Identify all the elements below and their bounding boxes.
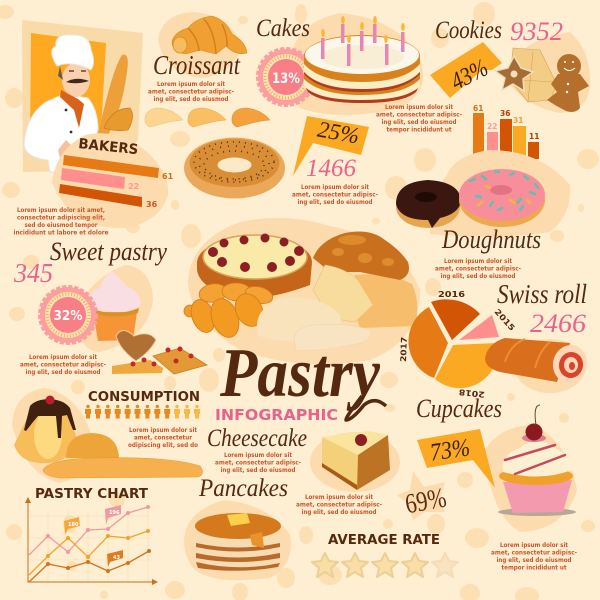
text: doughnuts lorem: ing elit, sed do eiusmod xyxy=(440,273,516,280)
icon: pancake stack xyxy=(195,513,281,571)
badge: 32% xyxy=(40,287,96,343)
badge: 69%: 69% xyxy=(403,483,449,520)
bar: 61: 61 xyxy=(162,172,174,181)
text: cheesecake lorem right: amet, consectetur adipisc- xyxy=(296,502,382,508)
icon: braided bread xyxy=(184,282,275,341)
panel: bakers portrait xyxy=(22,20,143,172)
panel: bakers bar chart xyxy=(52,133,174,228)
icon: baguette xyxy=(98,55,128,135)
heading: cakes: Cakes xyxy=(256,15,310,42)
icon: cookies xyxy=(495,48,589,112)
heading: doughnuts: Doughnuts xyxy=(441,225,541,254)
text: 25% lorem: ing elit, sed do eiusmod xyxy=(298,199,372,206)
callout: 43% xyxy=(430,42,502,98)
pie chart xyxy=(399,290,517,399)
text: croissant lorem: Lorem ipsum dolor sit xyxy=(157,81,225,88)
icon: cherry cake xyxy=(197,234,312,298)
panel: pancakes xyxy=(184,475,291,580)
panel: pudding and breads xyxy=(12,388,203,483)
text: croissant lorem: ing elit, sed do eiusmod xyxy=(154,96,228,103)
labels: years xyxy=(399,290,517,399)
labels: years: 2017 xyxy=(399,337,409,362)
text: sweet pastry lorem xyxy=(20,354,106,376)
callout: 25% xyxy=(293,116,369,176)
line chart xyxy=(25,497,158,585)
panel: cupcakes xyxy=(397,394,577,572)
text: consumption lorem: Lorem ipsum dolor sit xyxy=(129,427,197,434)
icon: cheesecake slice xyxy=(322,431,390,490)
icon: frosted cupcake xyxy=(88,271,140,341)
text: bakers lorem: Lorem ipsum dolor sit amet, xyxy=(17,207,105,214)
text: doughnuts lorem: Lorem ipsum dolor sit xyxy=(444,258,512,265)
flag: 180: 180 xyxy=(68,522,79,528)
heading: croissant: Croissant xyxy=(153,50,241,80)
heading: cookies: Cookies xyxy=(435,17,502,44)
heading: swiss roll: Swiss roll xyxy=(497,279,587,309)
icon: chocolate doughnut xyxy=(396,180,461,228)
text: cheesecake lorem right xyxy=(296,494,382,516)
subtitle: infographic: INFOGRAPHIC xyxy=(215,406,338,424)
panel: croissant xyxy=(145,12,270,127)
icon: dough xyxy=(257,297,371,350)
labels: years: 2016 xyxy=(438,290,466,299)
text: croissant lorem: amet, consectetur adipisc- xyxy=(148,88,234,96)
text: sweet pastry lorem: ing elit, sed do eiusmod xyxy=(26,369,100,376)
text: cupcakes lorem: tempor incididunt ut xyxy=(502,564,567,572)
text: cheesecake lorem left: amet, consectetur adipisc- xyxy=(215,460,301,466)
number: 1466: 1466 xyxy=(306,155,356,182)
icon: bun xyxy=(104,108,133,131)
panel: cakes xyxy=(256,13,462,134)
panel: swiss roll xyxy=(485,279,591,393)
heading: bakers: BAKERS xyxy=(78,136,139,158)
icon: gingerbread man xyxy=(547,54,589,112)
bar chart: five bars: 36 xyxy=(500,109,510,118)
text: cakes lorem: amet, consectetur adipisc- xyxy=(376,112,462,118)
text: cupcakes lorem xyxy=(491,542,577,572)
text: cupcakes lorem: amet, consectetur adipisc- xyxy=(491,550,577,556)
number: 345: 345 xyxy=(13,258,53,288)
callout: 73%: 73% xyxy=(428,434,472,467)
panel: central pastries xyxy=(184,218,420,364)
text: cheesecake lorem left: Lorem ipsum dolor sit xyxy=(224,452,292,459)
icon: waffles and heart cookie xyxy=(112,330,207,374)
callout: 73% xyxy=(417,429,495,488)
heading: pancakes: Pancakes xyxy=(198,475,288,502)
icon: pudding xyxy=(14,396,77,463)
icon: pink doughnut xyxy=(459,169,545,227)
panel: cookies xyxy=(430,17,590,113)
text: cakes lorem: tempor incididunt ut xyxy=(386,126,452,134)
text: cheesecake lorem right: ing elit, sed do eiusmod xyxy=(302,509,376,516)
text: consumption lorem: amet, consectetur xyxy=(134,434,193,442)
heading: average rate: AVERAGE RATE xyxy=(328,533,440,548)
panel: doughnuts xyxy=(396,150,570,280)
text: bakers lorem: incididunt ut labore et dolore xyxy=(14,230,108,236)
labels: years: 2018 xyxy=(458,387,485,399)
badge: 32%: 32% xyxy=(54,309,82,324)
icon: bread loaf xyxy=(350,274,417,328)
title: pastry infographic: Pastry xyxy=(219,335,381,412)
bar: 22: 22 xyxy=(128,182,139,191)
text: cakes lorem: ing elit, sed do eiusmod xyxy=(382,119,456,126)
text: doughnuts lorem xyxy=(435,258,521,280)
icon: croissant xyxy=(172,16,247,54)
text: cakes lorem xyxy=(376,104,462,134)
panel: consumption xyxy=(85,389,200,449)
badge: 13%: 13% xyxy=(272,71,300,87)
text: consumption lorem: odipiscing elit, sed do xyxy=(128,442,198,449)
text: sweet pastry lorem: Lorem ipsum dolor sit xyxy=(29,354,97,361)
icon: baguette xyxy=(43,458,203,478)
icon: roll xyxy=(485,338,591,386)
icon: layered cake xyxy=(304,16,420,103)
heading: sweet pastry: Sweet pastry xyxy=(50,237,167,266)
heading: consumption: CONSUMPTION xyxy=(88,389,200,405)
bar chart: five bars: 22 xyxy=(487,122,497,131)
text: cheesecake lorem left: ing elit, sed do eiusmod xyxy=(220,467,296,474)
heading: cheesecake: Cheesecake xyxy=(207,425,307,452)
text: doughnuts lorem: amet, consectetur adipisc- xyxy=(435,266,521,272)
text: 25% lorem: amet, consectetur adipisc- xyxy=(292,192,378,198)
bar chart: five bars: 11 xyxy=(529,132,539,141)
bar chart: five bars: 31 xyxy=(513,116,523,125)
text: bakers lorem: consectetur adipiscing elit, xyxy=(17,214,105,222)
panel: cheesecake xyxy=(207,425,400,516)
badge: 69% xyxy=(397,471,449,520)
number: 2466: 2466 xyxy=(530,309,586,338)
text: cupcakes lorem: Lorem ipsum dolor sit xyxy=(500,542,568,549)
icon: cupcake xyxy=(498,405,576,516)
icon: glazed bun xyxy=(313,232,409,280)
flag: 43: 43 xyxy=(113,555,120,561)
text: bakers lorem xyxy=(14,207,108,236)
text: cupcakes lorem: ing elit, sed do eiusmod xyxy=(496,557,572,564)
text: sweet pastry lorem: amet, consectetur adipisc- xyxy=(20,362,106,368)
callout: 25%: 25% xyxy=(316,117,361,148)
panel: pastry chart xyxy=(25,487,158,585)
icon: small croissants xyxy=(145,108,270,127)
heading: pastry chart: PASTRY CHART xyxy=(35,487,148,502)
number: 9352: 9352 xyxy=(510,17,563,46)
text: cakes lorem: Lorem ipsum dolor sit xyxy=(385,104,453,111)
panel: sweet pastry xyxy=(13,237,207,376)
text: 25% lorem: Lorem ipsum dolor sit xyxy=(301,184,369,191)
text: cheesecake lorem right: Lorem ipsum dolor sit xyxy=(305,494,373,501)
callout: 43%: 43% xyxy=(447,54,493,96)
icon: bun xyxy=(66,433,119,458)
panel: average rate xyxy=(312,533,458,577)
pictogram: people xyxy=(85,405,200,418)
icon: bagel xyxy=(184,138,285,198)
flag: 196: 196 xyxy=(109,510,120,516)
bar: 36: 36 xyxy=(146,200,158,209)
icon: chef xyxy=(24,35,98,172)
text: croissant lorem xyxy=(148,81,234,103)
heading: cupcakes: Cupcakes xyxy=(416,394,502,423)
rating stars xyxy=(312,553,458,577)
bar chart: five bars xyxy=(473,104,539,161)
text: cheesecake lorem left xyxy=(215,452,301,474)
text: bakers lorem: sed do eiusmod tempor xyxy=(24,222,98,229)
icon: bread slices xyxy=(313,265,373,322)
badge: 13% xyxy=(258,49,314,105)
bar chart: five bars: 61 xyxy=(473,104,483,113)
text: consumption lorem xyxy=(128,427,198,449)
labels: years: 2015 xyxy=(493,307,517,333)
text: 25% lorem xyxy=(292,184,378,206)
